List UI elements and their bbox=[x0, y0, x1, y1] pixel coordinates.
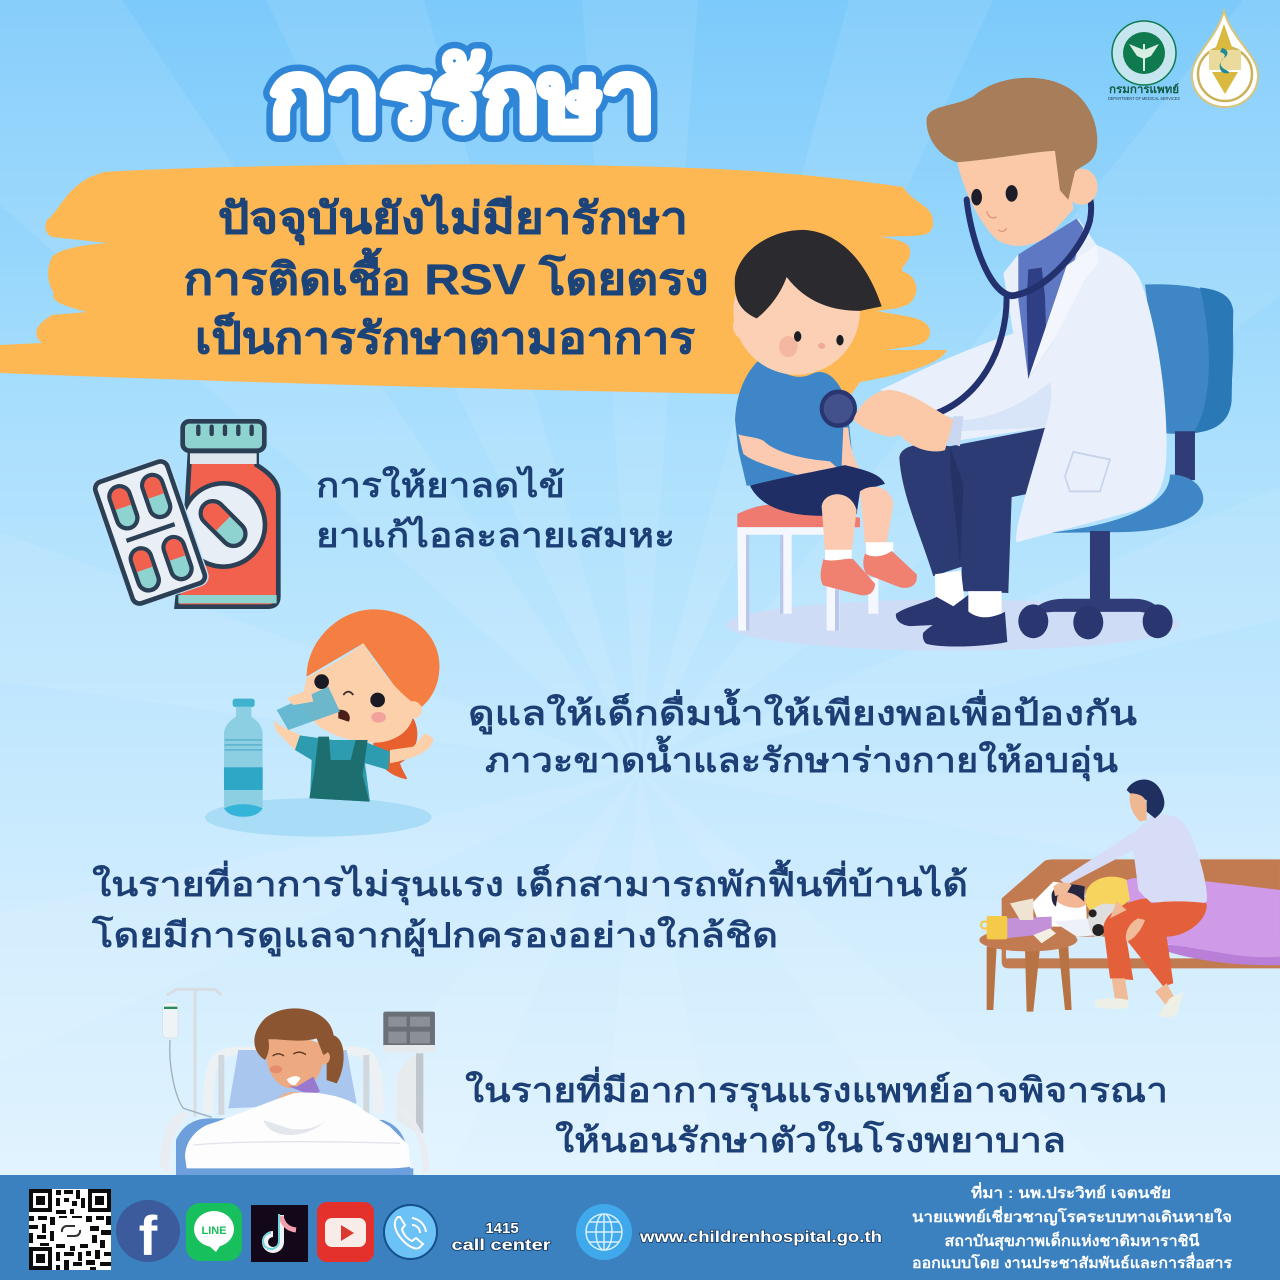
item 3 text: ในรายที่อาการไม่รุนแรง เด็กสามารถพักฟื้นที่บ้านได้ bbox=[92, 860, 968, 905]
head bbox=[307, 609, 439, 712]
source credit: นายแพทย์เชี่ยวชาญโรคระบบทางเดินหายใจ bbox=[912, 1206, 1232, 1226]
mother bbox=[1053, 780, 1207, 1017]
lab coat bbox=[880, 219, 1167, 542]
chair bbox=[1018, 284, 1233, 639]
illustration: girl drinking water bbox=[205, 609, 439, 837]
doctor's trousers bbox=[899, 427, 1047, 593]
boy's head bbox=[733, 230, 882, 375]
call center label bbox=[452, 1220, 550, 1254]
doctor's head bbox=[927, 78, 1098, 246]
call center label: call center bbox=[452, 1237, 550, 1254]
boy's stool bbox=[737, 505, 878, 631]
call center label: 1415 bbox=[485, 1220, 519, 1237]
logo: ministry of public health: กรมการแพทย์ bbox=[1109, 83, 1179, 96]
source credit bbox=[912, 1182, 1233, 1272]
item 1 text: การให้ยาลดไข้ bbox=[316, 466, 565, 505]
girl bbox=[254, 1008, 344, 1108]
logo: children's hospital drop bbox=[1192, 11, 1258, 107]
child bbox=[1051, 877, 1130, 937]
icon: TikTok bbox=[251, 1205, 308, 1262]
socks and shoes bbox=[896, 570, 1007, 646]
item 3 text: โดยมีการดูแลจากผู้ปกครองอย่างใกล้ชิด bbox=[92, 916, 778, 956]
icon: facebook bbox=[116, 1200, 180, 1267]
bedside table bbox=[979, 898, 1077, 1012]
banner heading: เป็นการรักษาตามอาการ bbox=[195, 312, 695, 363]
item 3 text bbox=[92, 860, 968, 956]
icon: facebook: f bbox=[139, 1204, 158, 1267]
body bbox=[295, 735, 390, 802]
icon: LINE bbox=[186, 1203, 242, 1261]
footer bar bbox=[0, 1175, 1280, 1280]
stethoscope bbox=[822, 181, 1091, 426]
IV pole bbox=[163, 989, 222, 1117]
website URL: www.childrenhospital.go.th bbox=[639, 1229, 882, 1246]
item 4 text bbox=[465, 1067, 1168, 1160]
banner heading bbox=[184, 193, 708, 363]
item 4 text: ในรายที่มีอาการรุนแรงแพทย์อาจพิจารณา bbox=[465, 1067, 1168, 1111]
source credit: ออกแบบโดย งานประชาสัมพันธ์และการสื่อสาร bbox=[912, 1252, 1233, 1272]
water bottle bbox=[224, 699, 263, 817]
illustration: parent caring for child on bed bbox=[979, 780, 1280, 1017]
title: การรักษา bbox=[269, 44, 655, 151]
monitor bbox=[383, 1012, 435, 1137]
item 2 text: ภาวะขาดน้ำและรักษาร่างกายให้อบอุ่น bbox=[485, 736, 1118, 781]
orange brush banner bbox=[0, 164, 947, 396]
item 2 text bbox=[468, 689, 1137, 781]
title: การรักษา bbox=[269, 44, 655, 151]
item 1 text: ยาแก้ไอละลายเสมหะ bbox=[316, 516, 675, 555]
source credit: สถาบันสุขภาพเด็กแห่งชาติมหาราชินี bbox=[944, 1231, 1200, 1251]
icon: medicine bottle and blister pack bbox=[89, 421, 278, 610]
item 2 text: ดูแลให้เด็กดื่มน้ำให้เพียงพอเพื่อป้องกัน bbox=[468, 689, 1137, 734]
pillow bbox=[228, 1050, 357, 1108]
boy's body bbox=[735, 356, 917, 595]
source credit: ที่มา : นพ.ประวิทย์ เจตนชัย bbox=[971, 1182, 1171, 1202]
glass bbox=[277, 687, 340, 730]
banner heading: ปัจจุบันยังไม่มียารักษา bbox=[218, 193, 688, 246]
blanket bbox=[185, 1092, 411, 1171]
banner heading: การติดเชื้อ RSV โดยตรง bbox=[184, 247, 708, 304]
icon: globe bbox=[576, 1204, 632, 1260]
headboard bbox=[203, 1047, 383, 1113]
shirt and tie bbox=[1018, 219, 1098, 379]
icon: YouTube bbox=[317, 1202, 374, 1262]
hair tail bbox=[373, 718, 417, 779]
icon: LINE: LINE bbox=[201, 1225, 227, 1237]
illustration: doctor and boy bbox=[727, 78, 1233, 651]
illustration: child in hospital bed bbox=[160, 989, 435, 1177]
icon: phone bbox=[384, 1205, 437, 1259]
logo: ministry of public health bbox=[1108, 21, 1180, 101]
doctor's hand bbox=[853, 390, 953, 451]
QR code bbox=[29, 1189, 111, 1270]
item 1 text bbox=[316, 466, 675, 555]
logo: ministry of public health: DEPARTMENT OF MEDICAL SERVICES bbox=[1108, 96, 1180, 101]
item 4 text: ให้นอนรักษาตัวในโรงพยาบาล bbox=[555, 1121, 1066, 1160]
